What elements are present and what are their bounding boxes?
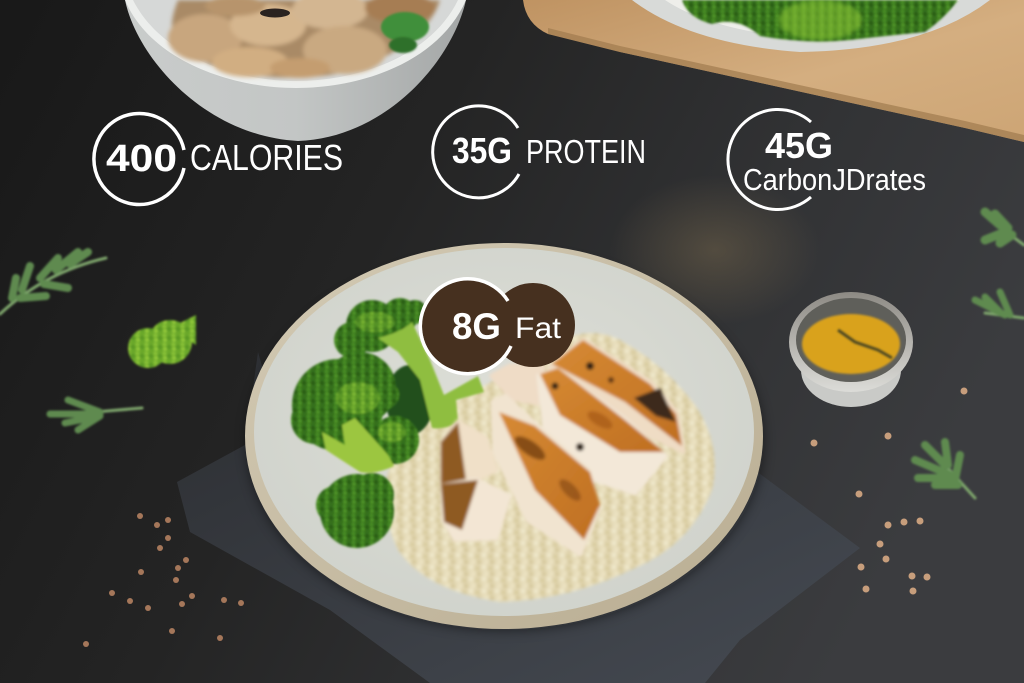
chicken slice: left upper xyxy=(441,422,496,488)
callout: 45G carbohydrates: CarbonJDrates xyxy=(743,162,926,197)
callout: 8G fat: 8G xyxy=(452,306,501,347)
broccoli group xyxy=(291,298,484,548)
ring xyxy=(94,113,184,204)
top white bowl of chicken xyxy=(125,0,466,141)
number disc and ring xyxy=(420,279,514,374)
callout: 45G carbohydrates xyxy=(728,110,926,210)
sauce cup xyxy=(789,292,913,407)
napkin xyxy=(177,352,860,683)
lower broccoli head xyxy=(291,352,419,464)
chicken pieces in bowl xyxy=(168,0,440,78)
dark broccoli behind stalks xyxy=(386,365,434,435)
herb: top right xyxy=(985,212,1024,245)
callout: 8G fat: Fat xyxy=(515,312,562,345)
plate on board xyxy=(632,0,990,52)
main plate xyxy=(245,243,763,630)
cutting board with broccoli plate xyxy=(523,0,1024,142)
green leaf in bowl xyxy=(381,12,429,53)
chicken slice: back xyxy=(492,366,543,403)
fat label backing disc xyxy=(491,283,575,367)
upper broccoli head xyxy=(334,298,427,358)
chicken slice: front xyxy=(493,396,600,554)
callout: 35G protein: PROTEIN xyxy=(526,133,646,170)
herb: lower left xyxy=(50,400,142,430)
callout: 400 calories: 400 xyxy=(106,138,177,180)
couscous xyxy=(385,333,715,602)
herb sprigs xyxy=(0,212,1024,498)
herb: mid right xyxy=(975,292,1024,318)
ring xyxy=(728,110,811,210)
lower broccoli stalks xyxy=(322,418,394,473)
callout: 35G protein xyxy=(433,106,646,198)
chicken slice: middle xyxy=(539,368,665,493)
callout: 8G fat xyxy=(420,279,575,374)
callout: 35G protein: 35G xyxy=(452,130,512,171)
chicken slices xyxy=(441,340,683,554)
herb: upper left xyxy=(0,252,106,314)
ring xyxy=(433,106,519,198)
chicken slice: left lower xyxy=(441,480,509,539)
callout: 400 calories: CALORIES xyxy=(190,137,343,178)
upper broccoli stalks xyxy=(378,322,484,428)
small front broccoli xyxy=(316,473,394,548)
callout: 45G carbohydrates: 45G xyxy=(765,125,833,166)
small broccoli on table xyxy=(128,315,196,368)
chicken slice: right xyxy=(550,340,683,451)
callout: 400 calories xyxy=(94,113,343,204)
scattered seeds xyxy=(83,388,968,647)
herb: lower right xyxy=(915,442,975,498)
